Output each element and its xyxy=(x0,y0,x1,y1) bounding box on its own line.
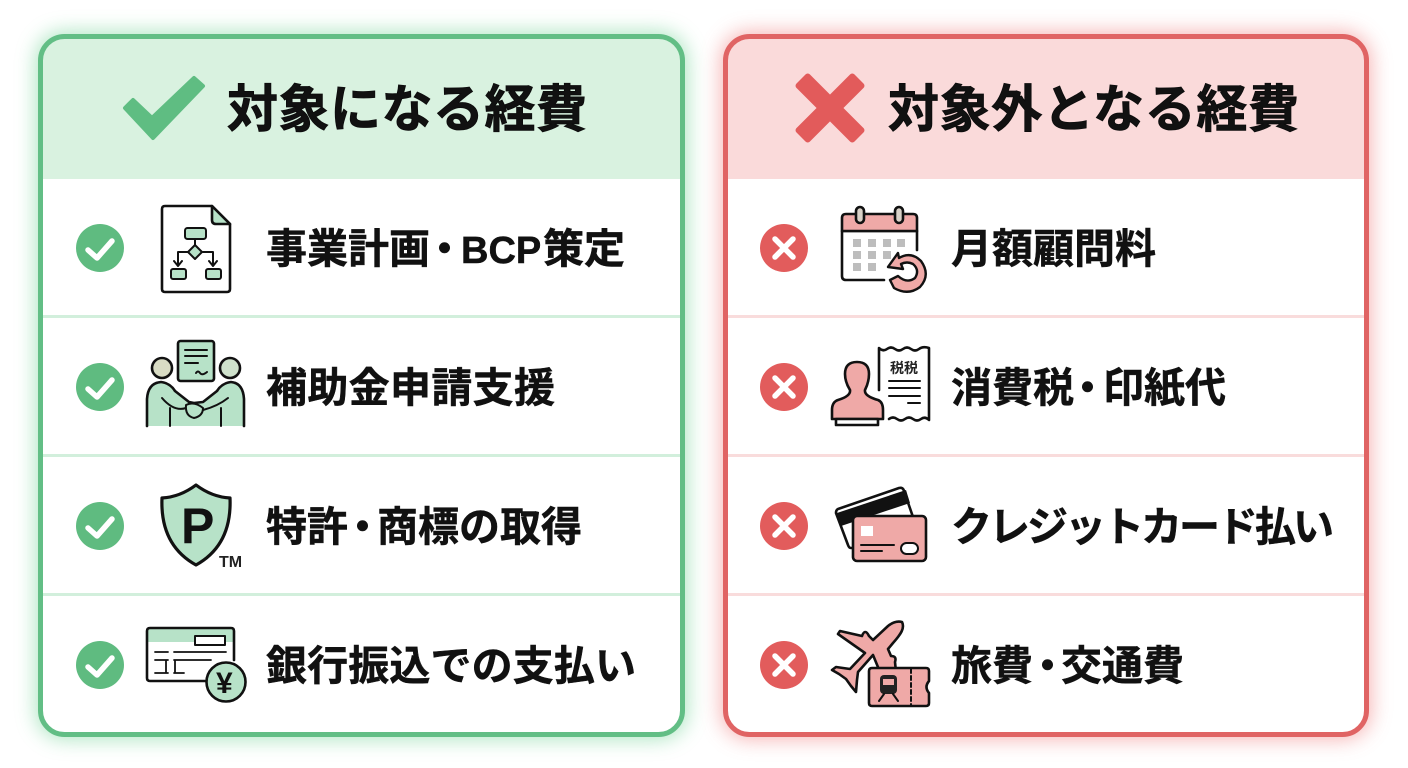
row: business plan xyxy=(76,206,625,292)
panel: non-eligible expenses xyxy=(721,32,1371,739)
row: business plan: BCP xyxy=(461,230,541,272)
icon: stamp and tax receipt: 税税 xyxy=(890,360,918,376)
icon: credit cards xyxy=(836,488,926,561)
row: credit card payment xyxy=(760,488,1334,561)
row: business plan: 事業計画 xyxy=(266,226,430,272)
icon: bank transfer slip with yen coin xyxy=(147,628,246,702)
icon: bank transfer slip with yen coin: ¥ xyxy=(216,667,233,700)
row: patent and trademark: ・ xyxy=(342,504,383,550)
row: bank transfer xyxy=(76,628,636,702)
row: monthly retainer: 月額顧問料 xyxy=(951,226,1156,272)
icon: patent shield: TM xyxy=(219,554,242,571)
heading: non-eligible: 対象外となる経費 xyxy=(888,81,1299,138)
row: subsidy application xyxy=(76,341,555,426)
row: business plan: 策定 xyxy=(543,226,625,272)
row: credit card payment: クレジットカード払い xyxy=(951,504,1334,550)
row: travel and transportation xyxy=(760,622,1184,706)
icon: airplane and train ticket xyxy=(832,622,929,706)
row: consumption tax and stamps: 消費税 xyxy=(951,365,1074,411)
row: subsidy application: 補助金申請支援 xyxy=(266,365,555,411)
icon: flowchart document xyxy=(162,206,230,292)
row: monthly retainer xyxy=(760,207,1156,292)
row: patent and trademark: 商標の取得 xyxy=(377,504,582,550)
panel: eligible expenses xyxy=(36,32,687,739)
icon: patent shield: P xyxy=(181,498,214,554)
row: consumption tax and stamps: 印紙代 xyxy=(1103,365,1226,411)
icon: handshake with document xyxy=(147,341,244,426)
row: patent and trademark: 特許 xyxy=(266,504,348,550)
row: bank transfer: 銀行振込での支払い xyxy=(266,643,636,689)
row: travel and transportation: ・ xyxy=(1027,643,1068,689)
icon: stamp and tax receipt xyxy=(832,347,929,425)
icon: calendar with return arrow xyxy=(842,207,926,292)
row: travel and transportation: 交通費 xyxy=(1061,643,1184,689)
row: consumption tax and stamps: ・ xyxy=(1067,365,1108,411)
row: patent and trademark xyxy=(76,485,582,571)
icon: patent shield xyxy=(162,485,242,571)
icon: large red cross xyxy=(794,72,866,144)
row: consumption tax and stamps xyxy=(760,347,1226,425)
icon: large green check xyxy=(125,78,203,138)
row: travel and transportation: 旅費 xyxy=(951,643,1033,689)
row: business plan: ・ xyxy=(424,226,465,272)
heading: eligible: 対象になる経費 xyxy=(227,81,587,138)
